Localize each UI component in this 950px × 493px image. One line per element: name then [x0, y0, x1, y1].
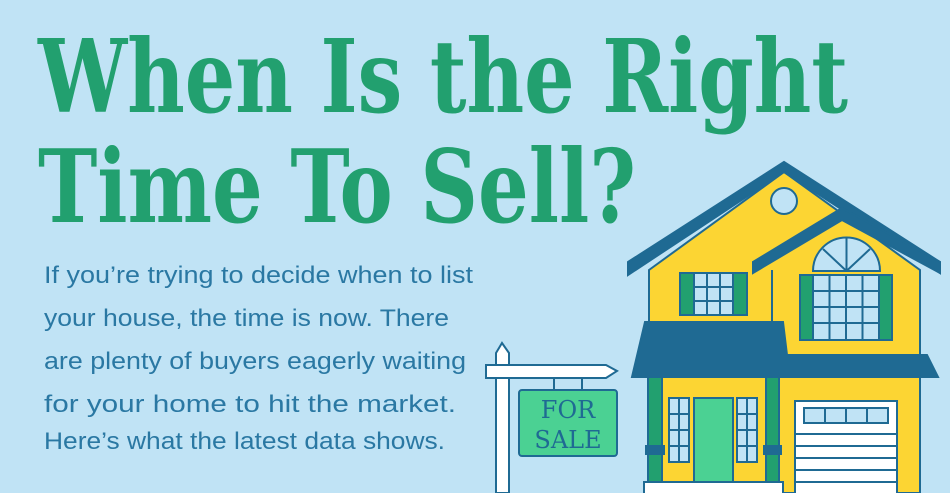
for sale sign	[486, 343, 617, 493]
intro paragraph: are plenty of buyers eagerly waiting	[44, 348, 466, 375]
for sale sign: SALE	[534, 426, 602, 454]
steps	[644, 482, 783, 493]
door	[694, 398, 733, 482]
big window	[800, 275, 892, 340]
title: Time To Sell?	[38, 127, 636, 246]
round window	[771, 188, 797, 214]
columns	[648, 377, 662, 483]
house	[628, 162, 940, 493]
porch roof	[632, 322, 938, 377]
intro paragraph: for your home to hit the market.	[44, 391, 456, 418]
intro paragraph	[44, 262, 473, 455]
intro paragraph: your house, the time is now. There	[44, 305, 449, 332]
intro paragraph: If you’re trying to decide when to list	[44, 262, 473, 289]
intro paragraph: Here’s what the latest data shows.	[44, 428, 445, 455]
main roof	[628, 162, 940, 275]
title	[37, 17, 848, 246]
for sale sign: FOR	[541, 396, 596, 424]
arch window	[813, 237, 880, 271]
garage	[795, 401, 897, 493]
walls	[649, 172, 920, 493]
side windows	[669, 398, 689, 462]
second gable roof	[753, 208, 940, 273]
upper left window	[680, 273, 747, 315]
title: When Is the Right	[37, 17, 848, 136]
